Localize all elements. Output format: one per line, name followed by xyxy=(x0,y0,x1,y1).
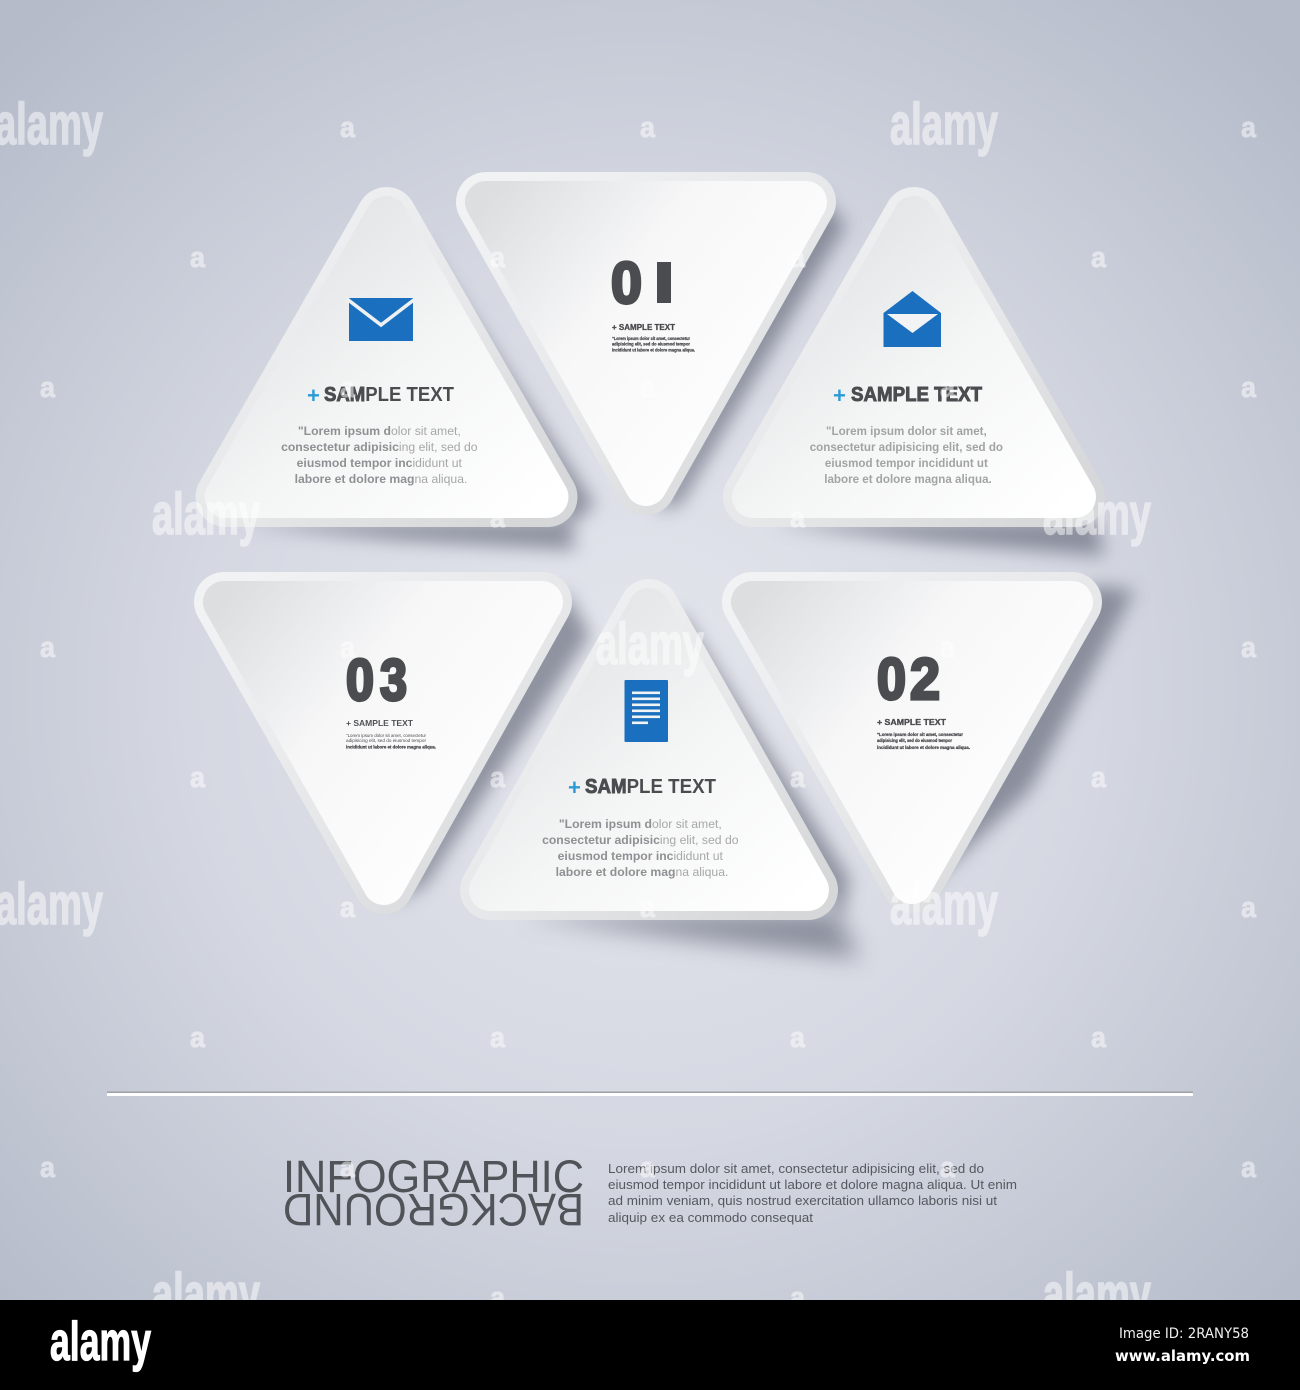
watermark pattern: a xyxy=(340,372,356,404)
triangle rim xyxy=(226,217,548,497)
small body text: "Lorem ipsum dolor sit amet, consectetur xyxy=(346,733,426,738)
small body text: incididunt ut labore et dolore magna aliqua. xyxy=(877,745,970,750)
watermark pattern: a xyxy=(790,502,806,534)
small heading: + SAMPLE TEXT xyxy=(612,322,676,332)
body text: labore et dolore magna aliqua. xyxy=(295,472,467,486)
body text: eiusmod tempor incididunt ut xyxy=(297,456,462,470)
number 02: 2 xyxy=(910,647,940,712)
body text: consectetur adipisicing elit, sed do xyxy=(542,833,739,847)
number 02 xyxy=(877,647,940,712)
number 01 xyxy=(611,251,671,316)
watermark pattern: alamy xyxy=(890,872,998,937)
panel: open envelope triangle xyxy=(753,217,1075,497)
watermark pattern: a xyxy=(940,1152,956,1184)
triangle face xyxy=(486,202,806,485)
number 02: 0 xyxy=(877,647,906,712)
watermark pattern: a xyxy=(790,242,806,274)
image id: Image ID: 2RANY58 xyxy=(1119,1326,1249,1342)
small body text: "Lorem ipsum dolor sit amet, consectetur xyxy=(877,732,963,737)
body text: consectetur adipisicing elit, sed do xyxy=(810,441,1003,454)
watermark pattern: a xyxy=(340,112,356,144)
triangle rim xyxy=(486,202,806,485)
heading: + xyxy=(568,775,581,800)
number 03: 3 xyxy=(380,648,407,713)
watermark pattern: a xyxy=(1241,1152,1257,1184)
watermark pattern: a xyxy=(340,632,356,664)
small body text: adipisicing elit, sed do eiusmod tempor xyxy=(346,738,426,743)
number 03 xyxy=(346,648,407,713)
small body text: adipisicing elit, sed do eiusmod tempor xyxy=(612,342,690,346)
triangle rim xyxy=(753,217,1075,497)
small body text: adipisicing elit, sed do eiusmod tempor xyxy=(877,738,952,743)
panel: envelope triangle xyxy=(226,217,548,497)
watermark pattern: a xyxy=(490,1282,506,1314)
triangle face xyxy=(752,602,1072,883)
body text: "Lorem ipsum dolor sit amet, xyxy=(298,424,461,438)
icon: open envelope xyxy=(884,291,941,347)
body text: labore et dolore magna aliqua. xyxy=(824,473,992,486)
watermark pattern: a xyxy=(1091,762,1107,794)
panel: 01 triangle xyxy=(486,202,806,485)
body text: "Lorem ipsum dolor sit amet, xyxy=(826,425,987,438)
watermark pattern: a xyxy=(340,892,356,924)
triangle face xyxy=(226,217,548,497)
watermark pattern: alamy xyxy=(152,1262,260,1327)
body text: "Lorem ipsum dolor sit amet, xyxy=(559,817,722,831)
body text: labore et dolore magna aliqua. xyxy=(556,865,728,879)
title: infographic background: BACKGROUND xyxy=(283,1184,584,1235)
description paragraph: eiusmod tempor incididunt ut labore et dolore magna aliqua. Ut enim xyxy=(608,1178,1017,1192)
watermark pattern: a xyxy=(640,112,656,144)
website: www.alamy.com xyxy=(1115,1347,1250,1365)
watermark pattern: alamy xyxy=(890,92,998,157)
icon: closed envelope xyxy=(347,298,415,341)
panel: 02 triangle xyxy=(752,602,1072,883)
watermark pattern: a xyxy=(190,242,206,274)
panel: document triangle xyxy=(490,609,808,890)
watermark pattern: a xyxy=(40,1152,56,1184)
triangle rim xyxy=(490,609,808,890)
watermark pattern: a xyxy=(1241,892,1257,924)
watermark pattern: a xyxy=(640,372,656,404)
triangle face xyxy=(490,609,808,890)
small body text: "Lorem ipsum dolor sit amet, consectetur xyxy=(612,336,690,341)
watermark pattern: a xyxy=(190,1022,206,1054)
watermark pattern: a xyxy=(490,1022,506,1054)
watermark pattern: a xyxy=(190,762,206,794)
panel: 03 triangle xyxy=(224,602,542,884)
small body text: incididunt ut labore et dolore magna aliqua. xyxy=(346,744,436,750)
watermark pattern: a xyxy=(940,372,956,404)
watermark pattern: alamy xyxy=(1043,482,1151,547)
watermark pattern: a xyxy=(640,1152,656,1184)
number 03: 0 xyxy=(346,648,374,713)
watermark pattern: alamy xyxy=(152,482,260,547)
alamy logo: alamy xyxy=(50,1310,151,1372)
number 01: 0 xyxy=(611,251,642,316)
watermark pattern: a xyxy=(490,242,506,274)
icon: document xyxy=(624,680,668,742)
watermark pattern: a xyxy=(1091,1022,1107,1054)
watermark pattern: a xyxy=(790,1022,806,1054)
watermark pattern: alamy xyxy=(596,612,704,677)
triangle face xyxy=(224,602,542,884)
small body text: incididunt ut labore et dolore magna aliqua. xyxy=(612,348,695,352)
cast shadows xyxy=(240,195,1135,958)
watermark pattern: a xyxy=(790,1282,806,1314)
watermark pattern: a xyxy=(1091,242,1107,274)
body text: eiusmod tempor incididunt ut xyxy=(825,457,988,470)
title: infographic background: INFOGRAPHIC xyxy=(283,1151,584,1202)
watermark pattern: a xyxy=(1241,632,1257,664)
triangle face xyxy=(753,217,1075,497)
body text: consectetur adipisicing elit, sed do xyxy=(281,440,478,454)
description paragraph: Lorem ipsum dolor sit amet, consectetur adipisicing elit, sed do xyxy=(608,1162,984,1176)
heading: SAMPLE TEXT xyxy=(324,384,454,406)
watermark pattern: a xyxy=(1241,112,1257,144)
watermark pattern: a xyxy=(490,502,506,534)
triangle rim xyxy=(224,602,542,884)
heading: + xyxy=(833,383,846,408)
heading: SAMPLE TEXT xyxy=(851,384,982,406)
watermark pattern: a xyxy=(490,762,506,794)
triangle rim xyxy=(752,602,1072,883)
watermark pattern: a xyxy=(340,1152,356,1184)
watermark pattern: a xyxy=(640,892,656,924)
footer bar xyxy=(0,1300,1300,1390)
heading: SAMPLE TEXT xyxy=(585,776,716,798)
watermark pattern: a xyxy=(1241,372,1257,404)
watermark pattern: a xyxy=(40,632,56,664)
heading: + xyxy=(307,383,320,408)
watermark pattern: alamy xyxy=(1043,1262,1151,1327)
title: infographic background xyxy=(283,1151,584,1235)
watermark pattern: a xyxy=(940,632,956,664)
description paragraph: aliquip ex ea commodo consequat xyxy=(608,1211,814,1225)
body text: eiusmod tempor incididunt ut xyxy=(558,849,723,863)
divider line xyxy=(107,1092,1193,1096)
description paragraph: ad minim veniam, quis nostrud exercitation ullamco laboris nisi ut xyxy=(608,1194,998,1208)
small heading: + SAMPLE TEXT xyxy=(877,717,947,727)
small heading: + SAMPLE TEXT xyxy=(346,718,414,728)
watermark pattern: a xyxy=(790,762,806,794)
watermark pattern: a xyxy=(40,372,56,404)
